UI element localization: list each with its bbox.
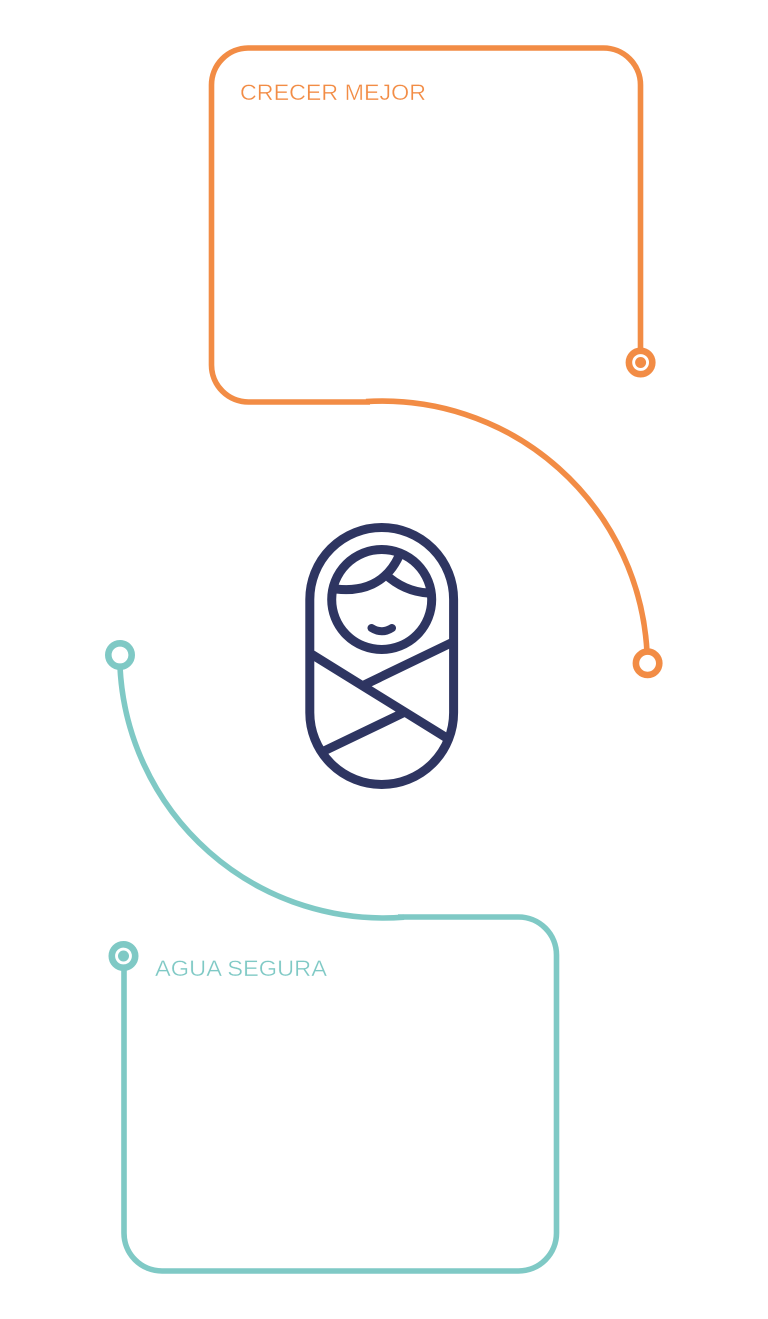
hair <box>336 556 428 593</box>
teal open ring marker <box>108 643 132 667</box>
mouth <box>372 628 392 631</box>
icon: swaddled baby <box>310 528 454 784</box>
teal panel outline <box>124 917 556 1271</box>
swaddle outline <box>310 528 454 784</box>
orange dotted ring marker <box>629 351 652 374</box>
heading: agua segura: AGUA SEGURA <box>155 956 327 981</box>
panel: crecer mejor <box>211 48 659 675</box>
swaddle wraps <box>312 642 452 751</box>
teal dotted ring marker <box>112 944 135 968</box>
heading: crecer mejor: CRECER MEJOR <box>240 80 426 105</box>
orange connector arc <box>366 401 647 652</box>
panel: agua segura <box>108 643 557 1271</box>
orange open ring marker <box>636 652 659 675</box>
teal connector arc <box>120 667 404 918</box>
baby head <box>332 550 432 650</box>
orange panel outline <box>211 48 640 402</box>
